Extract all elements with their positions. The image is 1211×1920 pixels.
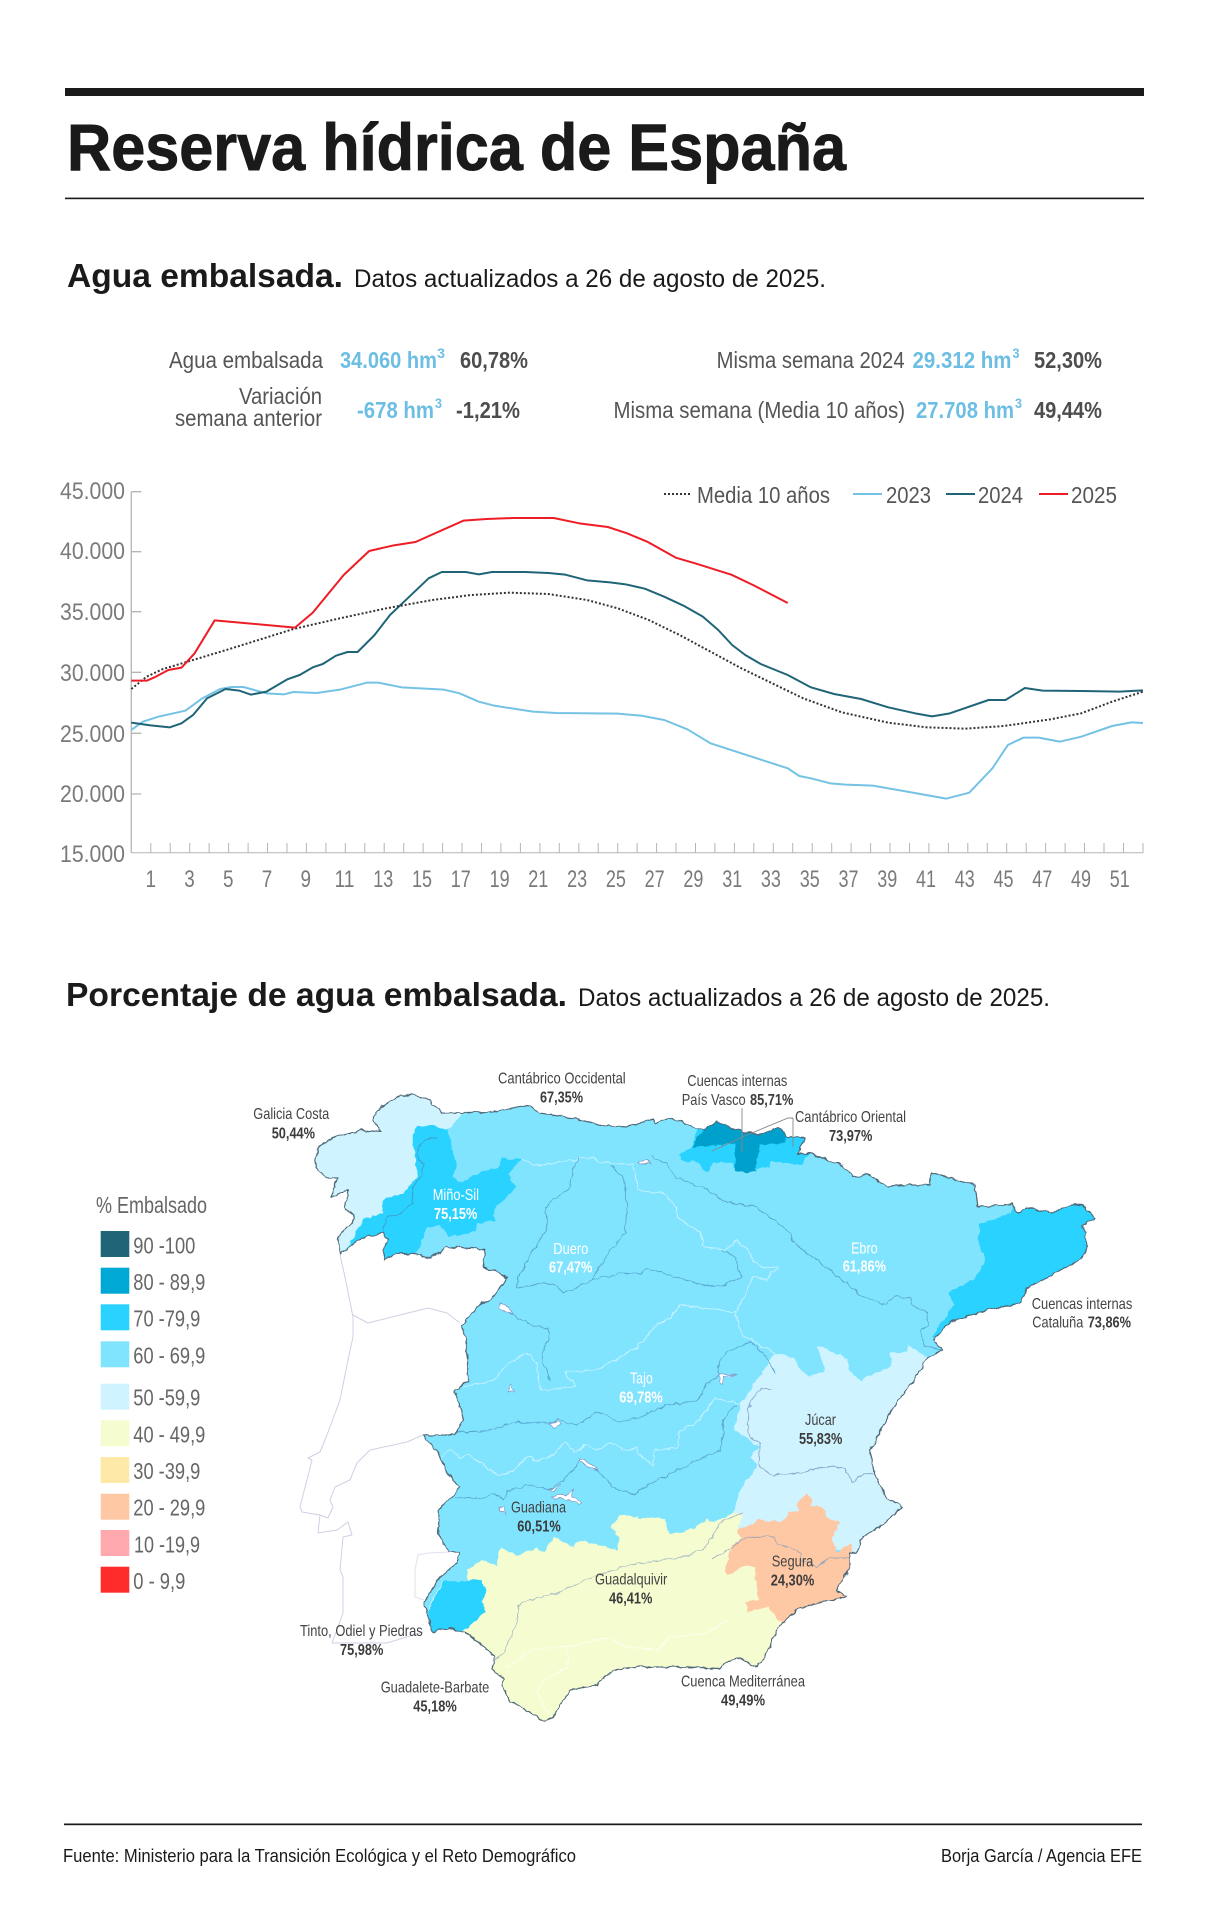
y axis: 40.000 [60,538,125,565]
label: Guadalete-Barbate: 45,18% [413,1699,457,1716]
x axis: 15 [412,866,432,893]
reservoirs [499,1159,737,1515]
heading: agua embalsada: Agua embalsada. [67,257,343,294]
y axis: 30.000 [60,660,125,687]
x axis: 39 [877,866,897,893]
chart legend: 2024 [978,482,1023,508]
stat: variación semana anterior [175,383,520,431]
x axis: 23 [567,866,587,893]
heading: agua embalsada [67,257,826,294]
x axis: 49 [1071,866,1091,893]
label: Cuenca Mediterránea: 49,49% [721,1693,765,1710]
label: Cuencas internas Cataluña [1032,1296,1132,1332]
source credit: Fuente: Ministerio para la Transición Ecológica y el Reto Demográfico [63,1846,576,1866]
stat: misma semana 2024: 3 [1012,345,1020,361]
heading: porcentaje de agua embalsada: Datos actualizados a 26 de agosto de 2025. [578,984,1050,1012]
heading: porcentaje de agua embalsada: Porcentaje de agua embalsada. [66,976,567,1013]
label: Guadalquivir: 46,41% [609,1590,652,1607]
label: Guadiana: 60,51% [517,1519,561,1536]
label: Cantábrico Oriental [795,1109,906,1145]
label: Cuencas internas País Vasco: Cuencas internas [687,1073,787,1090]
y axis [60,478,141,868]
stat: misma semana 2024: 29.312 hm [912,347,1012,373]
x axis: 3 [184,866,195,893]
label: Guadalquivir [595,1571,668,1607]
label: Guadiana: Guadiana [511,1499,566,1516]
stat: variación semana anterior: -1,21% [456,397,520,423]
y axis: 20.000 [60,781,125,808]
label: Duero: 67,47% [549,1260,592,1277]
x axis: 31 [722,866,742,893]
label: Cuencas internas País Vasco: 85,71% [750,1092,793,1109]
heading: porcentaje de agua embalsada [66,976,1050,1013]
label: Cuenca Mediterránea [681,1674,805,1710]
x axis: 19 [490,866,510,893]
header: title block [65,88,1144,199]
chart legend [664,482,1117,508]
x axis: 37 [838,866,858,893]
label: Ebro: 61,86% [843,1259,886,1276]
x axis: 43 [955,866,975,893]
x axis: 5 [223,866,233,893]
x axis: 51 [1110,866,1130,893]
x axis: 21 [528,866,548,893]
legend: % embalsado: 50 -59,9 [133,1385,200,1411]
stat: agua embalsada: 3 [437,345,445,361]
legend: % embalsado: 30 -39,9 [133,1458,200,1484]
chart legend: 2025 [1071,482,1117,508]
chart legend: Media 10 años [697,482,830,508]
x axis: 33 [761,866,781,893]
label: Galicia Costa: 50,44% [272,1125,315,1142]
legend: % embalsado: 70 -79,9 [133,1306,200,1332]
x axis: 27 [645,866,665,893]
x axis: 17 [451,866,471,893]
label: Segura: 24,30% [771,1573,814,1590]
label: Miño-Sil: Miño-Sil [433,1187,479,1204]
stat: misma semana 2024: 52,30% [1034,347,1102,373]
label: Cantábrico Occidental [498,1070,626,1106]
y axis: 35.000 [60,599,125,626]
basin map with rough coast [314,1093,1096,1722]
basin: Miño-Sil [350,1126,522,1270]
x axis: 9 [301,866,311,893]
label: Cuencas internas Cataluña: Cuencas internas [1032,1296,1132,1313]
basin: Guadalquivir y Cuenca Mediterránea [462,1513,800,1730]
stat: agua embalsada [169,345,528,373]
basin: Segura [724,1493,857,1623]
heading: agua embalsada: Datos actualizados a 26 de agosto de 2025. [354,265,826,293]
label: Júcar: Júcar [805,1412,837,1429]
map: Spain river basins [253,1070,1132,1740]
label: Tajo [619,1370,663,1407]
label: Tinto, Odiel y Piedras: 75,98% [340,1642,383,1659]
label: Cantábrico Oriental: 73,97% [829,1128,872,1145]
label: Galicia Costa [253,1106,329,1142]
x axis: 29 [683,866,703,893]
stat: agua embalsada: 34.060 hm [340,347,437,373]
stat: misma semana media 10 años [614,395,1102,423]
label: Cuencas internas País Vasco: País Vasco [682,1092,746,1109]
label: Cuencas internas Cataluña: 73,86% [1088,1315,1131,1332]
author credit: Borja García / Agencia EFE [941,1846,1142,1866]
line: 2025 [131,518,788,681]
portugal outline [300,1255,460,1643]
label: Segura: Segura [772,1554,813,1571]
label: Guadalete-Barbate [381,1680,489,1716]
legend: % embalsado: % Embalsado [96,1192,207,1218]
basin: Júcar [732,1344,930,1553]
stat: misma semana media 10 años: 3 [1015,395,1022,411]
label: Miño-Sil [433,1187,479,1223]
stat: variación semana anterior: -678 hm [357,397,434,423]
legend: % embalsado: 80 - 89,9 [133,1269,205,1295]
legend: % embalsado [96,1192,207,1594]
coastline and border [315,1095,1095,1722]
rivers [383,1138,943,1660]
legend: % embalsado: 60 - 69,9 [133,1342,205,1368]
label: Ebro: Ebro [851,1240,878,1257]
legend: % embalsado: 90 -100 [133,1232,195,1258]
line: 2023 [131,683,1143,799]
legend: % embalsado: 40 - 49,9 [133,1421,205,1447]
label: Júcar [799,1412,842,1448]
label: Tinto, Odiel y Piedras: Tinto, Odiel y Piedras [300,1623,423,1640]
label: Duero: Duero [553,1241,588,1258]
label: Ebro [843,1240,886,1276]
basin: Cuencas internas Cataluña [932,1205,1094,1338]
x axis [131,843,1143,893]
stat: variación semana anterior: semana anterior [175,405,322,431]
label: Guadiana [511,1499,566,1536]
stat: misma semana 2024: Misma semana 2024 [717,347,905,373]
x axis: 13 [373,866,393,893]
legend: % embalsado: 20 - 29,9 [133,1495,205,1521]
x axis: 41 [916,866,936,893]
label: Tajo: 69,78% [619,1390,663,1407]
stat: misma semana 2024 [717,345,1102,373]
label: Tinto, Odiel y Piedras [300,1623,423,1659]
y axis: 25.000 [60,721,125,748]
label: Miño-Sil: 75,15% [434,1206,477,1223]
label: Guadalete-Barbate: Guadalete-Barbate [381,1680,489,1697]
line: media 10 años [131,593,1143,729]
y axis: 45.000 [60,478,125,505]
label: Cantábrico Occidental: Cantábrico Occidental [498,1070,626,1087]
chart legend: 2023 [886,482,931,508]
stat: misma semana media 10 años: Misma semana (Media 10 años) [614,397,905,423]
legend: % embalsado: 0 - 9,9 [133,1568,185,1594]
label: Cuencas internas Cataluña: Cataluña [1032,1315,1083,1332]
label: Cuencas internas País Vasco [682,1073,793,1109]
line chart: agua embalsada por semana [60,478,1143,893]
leader lines: País Vasco and Cantábrico Oriental [712,1108,793,1152]
line: 2024 [131,572,1143,727]
x axis: 1 [145,866,156,893]
stat: agua embalsada: 60,78% [460,347,528,373]
x axis: 47 [1032,866,1052,893]
label: Tajo: Tajo [630,1370,653,1387]
x axis: 11 [334,866,354,893]
label: Júcar: 55,83% [799,1431,842,1448]
label: Duero [549,1241,592,1277]
stat: agua embalsada: Agua embalsada [169,347,323,373]
label: Cantábrico Occidental: 67,35% [540,1089,583,1106]
basin: Galicia Costa [315,1094,462,1252]
panel: key figures [169,345,1102,431]
stat: variación semana anterior: 3 [435,395,442,411]
legend: % embalsado: 10 -19,9 [134,1531,200,1557]
label: Cuenca Mediterránea: Cuenca Mediterránea [681,1674,805,1691]
basins [315,1094,1094,1720]
x axis: 7 [262,866,272,893]
y axis: 15.000 [60,841,125,868]
footer [63,1824,1142,1866]
basin boundaries [428,1157,777,1717]
x axis: 35 [800,866,820,893]
label: Cantábrico Oriental: Cantábrico Oriental [795,1109,906,1126]
basin: Tinto, Odiel y Piedras [428,1579,486,1632]
series lines [131,518,1143,799]
basin: Cuencas internas País Vasco [692,1122,786,1174]
label: Guadalquivir: Guadalquivir [595,1571,668,1588]
title: Reserva hídrica de España [67,110,847,184]
x axis: 25 [606,866,626,893]
stat: misma semana media 10 años: 49,44% [1034,397,1102,423]
stat: variación semana anterior: Variación [239,383,322,409]
stat: misma semana media 10 años: 27.708 hm [916,397,1014,423]
label: Galicia Costa: Galicia Costa [253,1106,329,1123]
x axis: 45 [994,866,1014,893]
basin: Cantábrico Oriental [679,1129,810,1174]
label: Segura [771,1554,814,1590]
